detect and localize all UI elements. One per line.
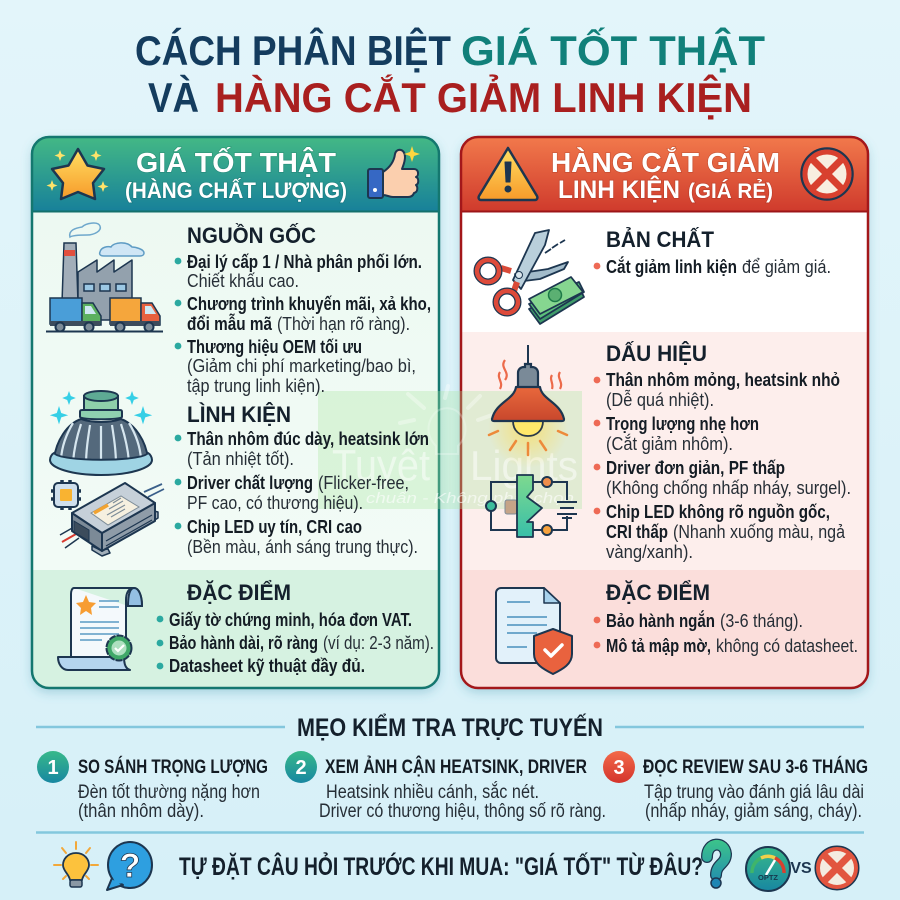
- section: nguồn gốc: (Thời hạn rõ ràng).: [277, 314, 410, 334]
- section: đặc điểm giá tốt: ĐẶC ĐIỂM: [187, 580, 291, 605]
- tip 3: [603, 751, 868, 822]
- panel heading: hàng cắt giảm: HÀNG CẮT GIẢM: [551, 146, 780, 178]
- section: dấu hiệu: Trọng lượng nhẹ hơn: [606, 414, 759, 434]
- section: đặc điểm hàng cắt giảm: Bảo hành ngắn: [606, 610, 715, 631]
- icon: LED driver: [60, 483, 164, 556]
- tip 2: Driver có thương hiệu, thông số rõ ràng.: [319, 801, 606, 822]
- icon: overheating lamp: [488, 345, 568, 468]
- tip 3: (nhấp nháy, giảm sáng, cháy).: [645, 801, 862, 822]
- section: dấu hiệu: CRI thấp: [606, 522, 668, 542]
- section: linh kiện: (Flicker-free,: [318, 473, 409, 493]
- tip 2: Heatsink nhiều cánh, sắc nét.: [326, 781, 539, 803]
- panel heading: hàng cắt giảm: [551, 146, 780, 204]
- icon: factory and trucks: [46, 223, 163, 332]
- tip 1: [37, 751, 268, 822]
- section: dấu hiệu: Driver đơn giản, PF thấp: [606, 458, 785, 478]
- panel header: hàng cắt giảm: [460, 136, 869, 212]
- section: nguồn gốc: Thương hiệu OEM tối ưu: [187, 337, 362, 357]
- section: bản chất: Cắt giảm linh kiện: [606, 256, 737, 277]
- panel heading: hàng cắt giảm: (GIÁ RẺ): [688, 180, 773, 203]
- section: linh kiện: [175, 402, 429, 557]
- watermark: [318, 386, 582, 509]
- title: GIÁ TỐT THẬT: [461, 26, 765, 74]
- icon: no sign small: [816, 846, 858, 890]
- section: nguồn gốc: Đại lý cấp 1 / Nhà phân phối lớn.: [187, 252, 422, 272]
- section: đặc điểm giá tốt: [157, 580, 434, 676]
- tip 2: 2: [295, 757, 307, 779]
- section: dấu hiệu: DẤU HIỆU: [606, 341, 707, 366]
- section: linh kiện: PF cao, có thương hiệu).: [187, 493, 363, 513]
- icon: scissors and money: [477, 230, 584, 324]
- tip 3: 3: [613, 757, 625, 779]
- tip 1: Đèn tốt thường nặng hơn: [78, 782, 260, 803]
- section: đặc điểm giá tốt: Giấy tờ chứng minh, hóa đơn VAT.: [169, 610, 412, 630]
- title: HÀNG CẮT GIẢM LINH KIỆN: [215, 73, 752, 121]
- section: linh kiện: Chip LED uy tín, CRI cao: [187, 517, 362, 537]
- icon: light bulb: [54, 842, 98, 887]
- tip 1: SO SÁNH TRỌNG LƯỢNG: [78, 755, 268, 778]
- section: đặc điểm giá tốt: (ví dụ: 2-3 năm).: [323, 633, 434, 653]
- icon: no sign: [802, 148, 852, 200]
- icon: gauge: OPTZ: [758, 873, 778, 882]
- section: dấu hiệu: (Dễ quá nhiệt).: [606, 389, 714, 410]
- section: nguồn gốc: (Giảm chi phí marketing/bao bì,: [187, 356, 416, 376]
- section: bản chất: [594, 227, 831, 277]
- icon: LED heatsink: [50, 391, 152, 475]
- section: đặc điểm hàng cắt giảm: ĐẶC ĐIỂM: [606, 580, 710, 605]
- icon: certificate scroll: [58, 588, 142, 670]
- icon: document with shield: [496, 588, 572, 674]
- section: dấu hiệu: (Không chống nhấp nháy, surgel).: [606, 478, 851, 498]
- section: nguồn gốc: Chương trình khuyến mãi, xả kho,: [187, 294, 431, 314]
- watermark: Tuyêt: [332, 441, 430, 490]
- section: linh kiện: (Bền màu, ánh sáng trung thực).: [187, 537, 418, 557]
- section: nguồn gốc: NGUỒN GỐC: [187, 222, 316, 248]
- icon: LED chip: [51, 480, 81, 510]
- section: dấu hiệu: Thân nhôm mỏng, heatsink nhỏ: [606, 370, 840, 390]
- section: linh kiện: (Tản nhiệt tốt).: [187, 449, 294, 469]
- section: đặc điểm hàng cắt giảm: không có datasheet.: [716, 636, 858, 656]
- icon: thumbs up: [368, 146, 420, 198]
- tip 1: 1: [47, 757, 59, 779]
- label: vs: VS: [790, 860, 812, 877]
- section: đặc điểm hàng cắt giảm: [594, 580, 858, 656]
- title: VÀ: [148, 74, 199, 121]
- section: dấu hiệu: [594, 341, 851, 562]
- tip 1: (thân nhôm dày).: [78, 801, 204, 822]
- section: đặc điểm giá tốt: Bảo hành dài, rõ ràng: [169, 633, 318, 653]
- panel header: giá tốt thật: [31, 136, 440, 212]
- section: nguồn gốc: Chiết khấu cao.: [187, 271, 299, 291]
- tip 3: Tập trung vào đánh giá lâu dài: [644, 782, 864, 803]
- panel heading: giá tốt thật: GIÁ TỐT THẬT: [136, 146, 336, 178]
- section: linh kiện: Thân nhôm đúc dày, heatsink lớn: [187, 429, 429, 449]
- section: linh kiện: LÌNH KIỆN: [187, 402, 291, 427]
- section: dấu hiệu: Chip LED không rõ nguồn gốc,: [606, 502, 830, 522]
- icon: star: [46, 149, 108, 199]
- section: đặc điểm hàng cắt giảm: (3-6 tháng).: [720, 611, 803, 631]
- section: đặc điểm giá tốt: Datasheet kỹ thuật đầy đủ.: [169, 656, 365, 676]
- panel: giá tốt thật: [31, 136, 440, 689]
- tip 2: XEM ẢNH CẬN HEATSINK, DRIVER: [325, 754, 587, 778]
- title: [135, 26, 765, 121]
- panel heading: giá tốt thật: (HÀNG CHẤT LƯỢNG): [125, 178, 347, 203]
- icon: simple circuit: [486, 475, 577, 537]
- icon: warning triangle: [479, 148, 537, 200]
- icon: large question mark: [707, 845, 726, 888]
- section: bản chất: BẢN CHẤT: [606, 227, 715, 252]
- panel: hàng cắt giảm linh kiện: [460, 136, 869, 689]
- heading: mẹo kiểm tra trực tuyến: MẸO KIỂM TRA TRỰC TUYẾN: [297, 713, 603, 742]
- section: nguồn gốc: tập trung linh kiện).: [187, 376, 325, 396]
- section: dấu hiệu: (Cắt giảm nhôm).: [606, 433, 733, 454]
- section: linh kiện: Driver chất lượng: [187, 473, 313, 493]
- section: nguồn gốc: [175, 222, 431, 396]
- section: dấu hiệu: (Nhanh xuống màu, ngả: [673, 522, 846, 542]
- section: đặc điểm hàng cắt giảm: Mô tả mập mờ,: [606, 636, 711, 656]
- panel heading: giá tốt thật: [125, 146, 347, 203]
- section: nguồn gốc: đổi mẫu mã: [187, 313, 273, 334]
- icon: question speech bubble: ?: [120, 847, 140, 885]
- title: CÁCH PHÂN BIỆT: [135, 26, 451, 74]
- section: dấu hiệu: vàng/xanh).: [606, 542, 693, 562]
- callout: câu hỏi trước khi mua: TỰ ĐẶT CÂU HỎI TRƯỚC KHI MUA: "GIÁ TỐT" TỪ ĐÂU?: [179, 851, 703, 881]
- section: bản chất: để giảm giá.: [742, 257, 831, 277]
- icon: question speech bubble: [107, 842, 152, 890]
- tip 2: [285, 751, 606, 822]
- watermark: Lights: [470, 442, 578, 489]
- watermark: chuẩn - Không phải chọn: [366, 490, 574, 507]
- panel heading: hàng cắt giảm: LINH KIỆN: [558, 174, 680, 204]
- icon: gauge: [746, 847, 790, 891]
